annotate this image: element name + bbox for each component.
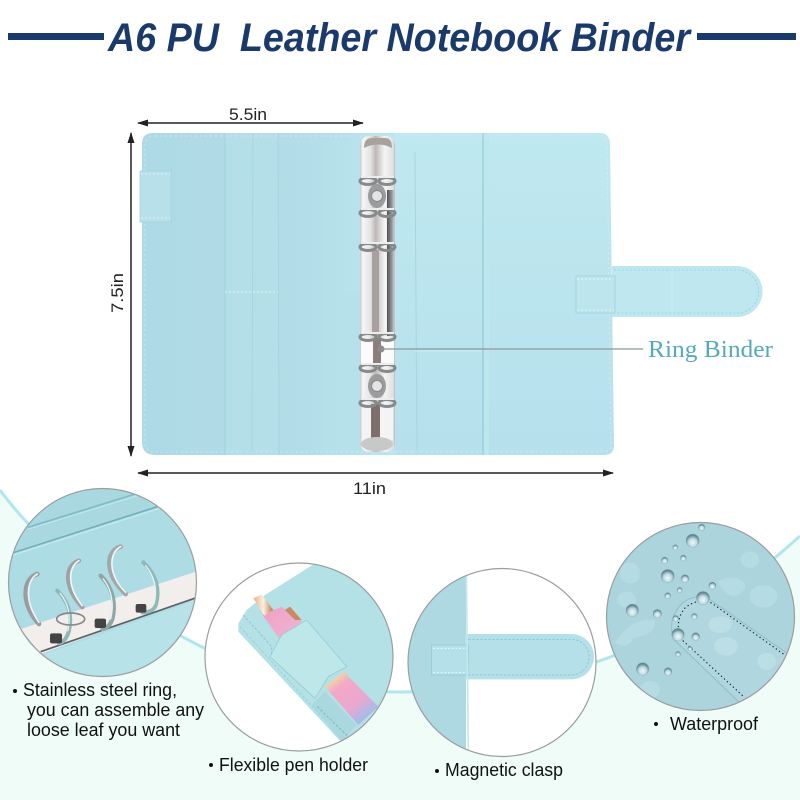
card slot panels: [225, 133, 279, 455]
detail circle: pen holder: [205, 563, 407, 751]
open notebook binder: [140, 133, 763, 455]
caption: stainless steel ring: you can assemble any: [27, 700, 204, 720]
pen loop: [270, 620, 347, 698]
caption: flexible pen holder: Flexible pen holder: [219, 755, 368, 775]
pen lower barrel: [325, 672, 378, 725]
caption: stainless steel ring: loose leaf you want: [27, 720, 180, 740]
magnetic strap: [612, 266, 763, 317]
ring binder callout: Ring Binder: [648, 337, 773, 363]
stitching: [145, 136, 611, 452]
metal ring mechanism: [360, 136, 395, 452]
caption: stainless steel ring: [13, 680, 204, 740]
pen upper barrel: [263, 607, 302, 640]
cover left: [142, 133, 400, 455]
detail circle: waterproof: [606, 522, 800, 725]
caption: stainless steel ring: Stainless steel ring,: [23, 680, 177, 700]
dimension: height 7.5in: 7.5in: [108, 273, 127, 313]
right pocket panels: [340, 133, 489, 455]
clasp loop: [576, 276, 615, 313]
ring binder callout: [378, 337, 773, 363]
dimension: width 5.5in: 5.5in: [229, 105, 267, 124]
mint background wave: [0, 490, 800, 800]
caption: waterproof: Waterproof: [670, 714, 759, 734]
cover right: [395, 133, 614, 455]
left pen loop: [140, 171, 171, 222]
lower pocket: [312, 692, 357, 742]
detail circle: magnetic clasp: [400, 567, 596, 767]
detail circle: stainless steel rings: [8, 484, 204, 684]
title: A6 PU Leather Notebook Binder: [107, 16, 692, 60]
dimension: width 11in: 11in: [353, 479, 386, 498]
caption: magnetic clasp: Magnetic clasp: [445, 760, 563, 780]
